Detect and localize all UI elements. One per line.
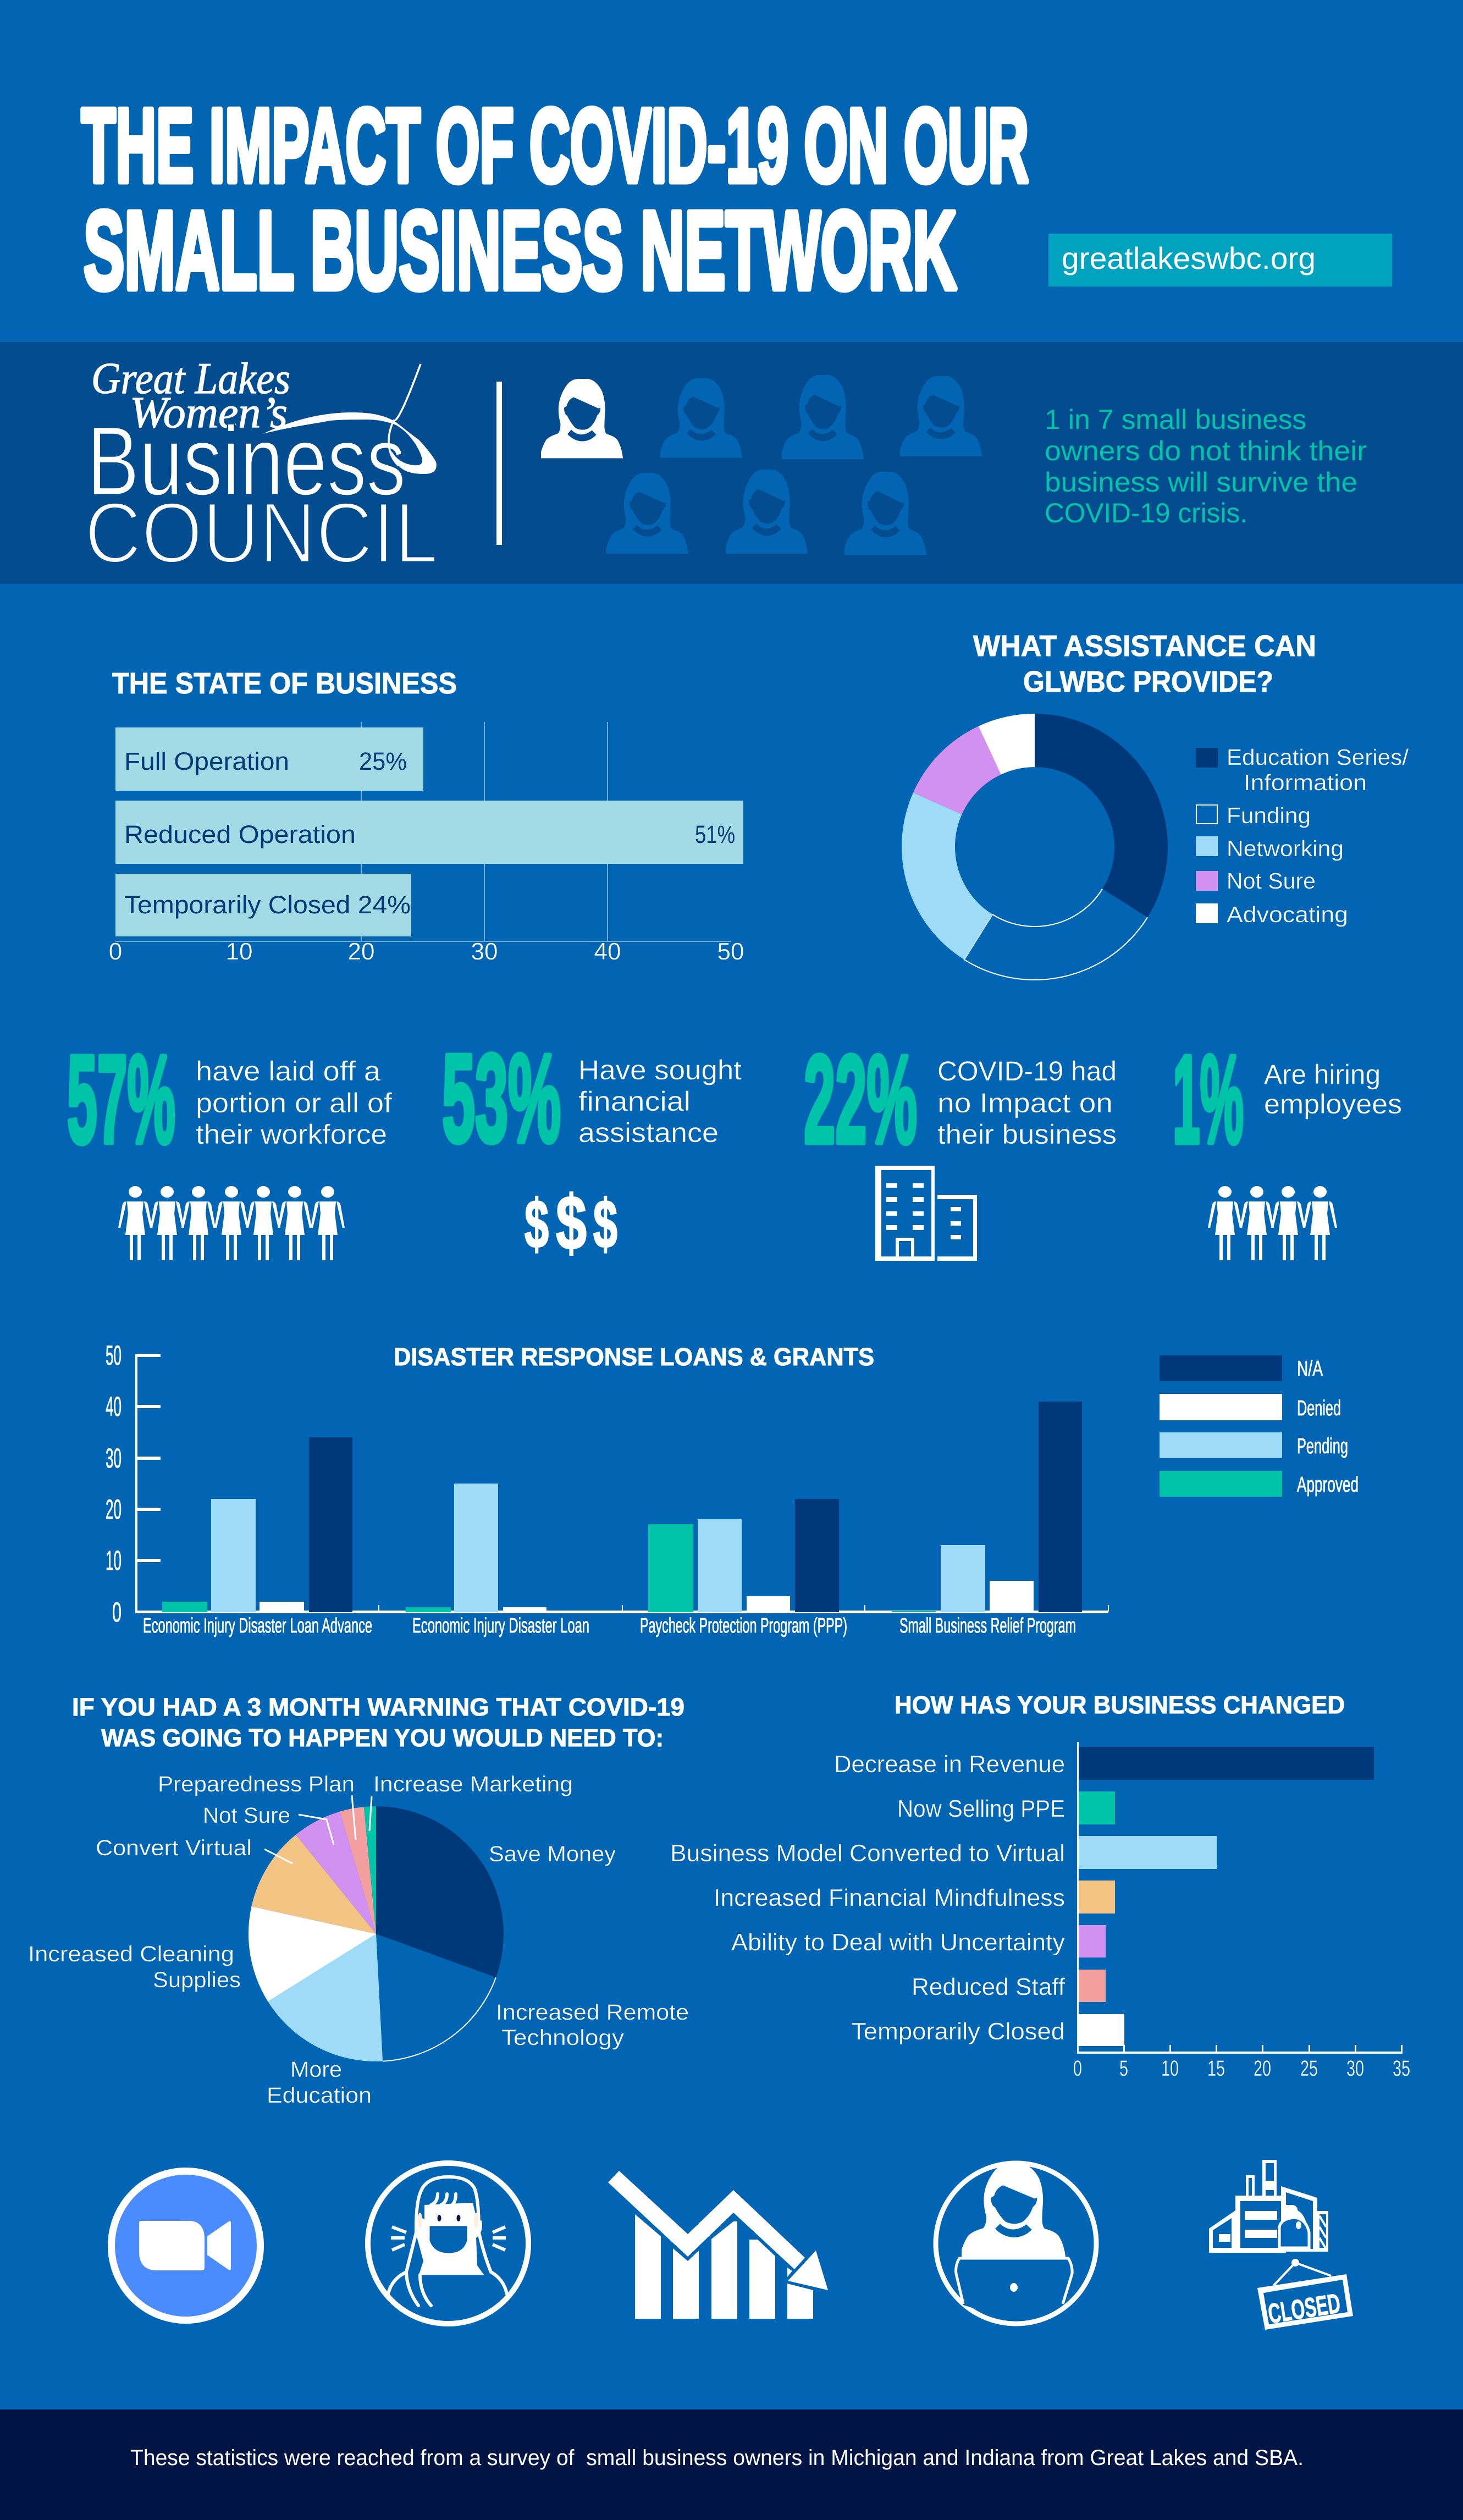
horizontal bar chart: Increased Financial Mindfulness [714, 1884, 1065, 1911]
bar chart: 25% [359, 747, 407, 775]
icon: video call [108, 2168, 264, 2324]
divider [496, 382, 502, 545]
panel: the state of business [109, 667, 744, 965]
stat: 57%: have laid off a [196, 1056, 380, 1087]
closed sign [1257, 2259, 1353, 2330]
legend: Advocating [1227, 902, 1348, 927]
column chart: 50 [106, 1340, 122, 1371]
band: 1 in 7 owners [0, 342, 1463, 584]
legend: Funding [1227, 803, 1311, 828]
legend: Networking [1227, 836, 1344, 861]
footer band [0, 2409, 1463, 2520]
logo: Great Lakes Women's Business Council: Business [87, 406, 406, 516]
text: 1 in 7 [1045, 404, 1367, 528]
pie labels: Increased Remote [496, 2000, 689, 2025]
pie chart [249, 1806, 504, 2061]
stat: 22%: their business [937, 1119, 1117, 1150]
stat: 22%: COVID-19 had [937, 1056, 1117, 1087]
pie labels: Not Sure [203, 1804, 290, 1828]
horizontal bar chart: Reduced Staff [912, 1973, 1065, 2000]
stat: 53%: 53% [442, 1029, 561, 1168]
horizontal bar chart: 20 [1254, 2056, 1271, 2081]
stat: 1%: 1% [1173, 1030, 1244, 1170]
panel: disaster response loans and grants [106, 1340, 1359, 1637]
stat: 1% [1173, 1030, 1402, 1260]
legend: Approved [1297, 1473, 1359, 1497]
closed sign: CLOSED [1266, 2287, 1343, 2329]
heading: GLWBC PROVIDE? [1023, 665, 1273, 698]
column chart: 40 [106, 1391, 122, 1422]
bars: group 2 [406, 1484, 546, 1612]
panel: what assistance can GLWBC provide [902, 630, 1409, 980]
logo: Great Lakes Women's Business Council: Great Lakes [91, 355, 290, 403]
heading [72, 1693, 684, 1752]
horizontal bar chart: Now Selling PPE [897, 1795, 1065, 1822]
heading [973, 630, 1316, 698]
text: 1 in 7: owners do not think their [1045, 435, 1367, 466]
factory [1209, 2160, 1328, 2253]
icon: dollar signs: $ [593, 1187, 617, 1262]
legend [1160, 1355, 1359, 1497]
pie labels: Education [267, 2083, 372, 2108]
horizontal bar chart: 5 [1119, 2056, 1128, 2081]
logo: Great Lakes Women's Business Council: COUNCIL [85, 485, 438, 581]
legend: Information [1244, 770, 1367, 795]
heading: THE STATE OF BUSINESS [112, 667, 457, 700]
stat: 22%: 22% [804, 1030, 917, 1170]
legend: Not Sure [1227, 868, 1316, 894]
icon: woman with laptop [936, 2163, 1096, 2324]
footnote text: These statistics were reached from a survey of small business owners in Michigan and Indiana from Great Lakes and SBA. [130, 2446, 1304, 2470]
donut chart [902, 714, 1168, 980]
stat: 57%: their workforce [196, 1119, 387, 1150]
bars: group 3 [648, 1499, 839, 1612]
bar chart: Full Operation [124, 747, 289, 775]
column chart: Paycheck Protection Program (PPP) [640, 1614, 847, 1637]
stat: 53% [442, 1029, 742, 1266]
horizontal bar chart: 25 [1300, 2056, 1318, 2081]
column chart: Economic Injury Disaster Loan [412, 1614, 589, 1637]
text: 1 in 7: 1 in 7 small business [1045, 404, 1306, 435]
horizontal bar chart [670, 1742, 1410, 2081]
icon: four women [1208, 1186, 1337, 1260]
panel: 3 month warning [28, 1693, 689, 2108]
bar chart: 30 [471, 938, 498, 965]
icon: dollar signs: $ [556, 1179, 587, 1266]
stat: 53%: financial [578, 1086, 691, 1117]
stat: 53%: Have sought [578, 1055, 742, 1085]
panel: how has your business changed [670, 1691, 1410, 2081]
column chart: Small Business Relief Program [899, 1614, 1076, 1637]
bars: group 1 [162, 1437, 352, 1612]
column chart: 20 [106, 1494, 122, 1525]
logo: Great Lakes Women's Business Council: Women’s [130, 389, 288, 437]
title [81, 87, 1029, 312]
heading: WHAT ASSISTANCE CAN [973, 630, 1316, 663]
pie labels: More [290, 2058, 342, 2082]
icon: dollar signs: $ [525, 1187, 549, 1262]
horizontal bar chart: 15 [1207, 2056, 1225, 2081]
horizontal bar chart: Business Model Converted to Virtual [670, 1840, 1065, 1867]
heading: DISASTER RESPONSE LOANS & GRANTS [394, 1343, 874, 1371]
legend: Education Series/ [1227, 745, 1409, 770]
horizontal bar chart: 0 [1073, 2056, 1082, 2081]
icon: office buildings [875, 1166, 977, 1261]
bar chart: 10 [226, 938, 252, 965]
heading: IF YOU HAD A 3 MONTH WARNING THAT COVID-19 [72, 1693, 684, 1721]
icon: seven women, one highlighted [541, 375, 982, 555]
logo: Great Lakes Women's Business Council [85, 355, 438, 581]
bar chart: Reduced Operation [124, 820, 356, 848]
column chart: 10 [106, 1545, 122, 1576]
stat: 57% [67, 1030, 392, 1260]
column chart [106, 1340, 1109, 1637]
stat: 22% [804, 1030, 1117, 1261]
stat: 1%: Are hiring [1264, 1059, 1381, 1090]
stat: 57%: 57% [67, 1030, 175, 1170]
icon: falling chart [608, 2171, 828, 2319]
pie labels: Preparedness Plan [158, 1772, 355, 1796]
leader lines [264, 1795, 372, 1863]
horizontal bar chart: 30 [1346, 2056, 1364, 2081]
bar chart: 51% [695, 820, 735, 848]
column chart: Economic Injury Disaster Loan Advance [143, 1614, 372, 1637]
horizontal bar chart: Ability to Deal with Uncertainty [731, 1929, 1065, 1956]
stat: 57%: portion or all of [196, 1088, 392, 1118]
heading: HOW HAS YOUR BUSINESS CHANGED [895, 1691, 1345, 1719]
stat: 53%: assistance [578, 1117, 719, 1148]
icon: closed factory [1209, 2160, 1353, 2330]
bar chart [109, 722, 744, 965]
column chart: 30 [106, 1443, 122, 1474]
website label: greatlakeswbc.org [1062, 241, 1316, 275]
text: 1 in 7: COVID-19 crisis. [1045, 498, 1247, 528]
bar chart: 40 [594, 938, 621, 965]
icon: seven women [118, 1186, 345, 1260]
pie labels: Increase Marketing [373, 1772, 573, 1796]
column chart: 0 [112, 1597, 122, 1628]
pie labels: Supplies [153, 1968, 241, 1992]
horizontal bar chart: 10 [1161, 2056, 1179, 2081]
bars: group 4 [892, 1402, 1082, 1612]
legend [1196, 745, 1409, 927]
pie labels: Save Money [489, 1842, 616, 1866]
bar chart: Temporarily Closed 24% [124, 891, 411, 919]
pie labels: Increased Cleaning [28, 1942, 234, 1966]
legend: Pending [1297, 1435, 1348, 1458]
stat: 1%: employees [1264, 1089, 1402, 1120]
horizontal bar chart: Decrease in Revenue [834, 1751, 1065, 1778]
bar chart: 0 [109, 938, 122, 965]
horizontal bar chart: Temporarily Closed [851, 2018, 1065, 2045]
horizontal bar chart: 35 [1393, 2056, 1410, 2081]
pie labels [28, 1772, 689, 2108]
icon: woman in mask [368, 2163, 528, 2324]
bar chart: 50 [717, 938, 744, 965]
text: 1 in 7: business will survive the [1045, 467, 1357, 498]
website label [1048, 234, 1392, 286]
pie labels: Technology [501, 2026, 624, 2050]
legend: Denied [1297, 1397, 1341, 1420]
pie labels: Convert Virtual [96, 1836, 252, 1860]
bar chart: 20 [348, 938, 374, 965]
stat: 22%: no Impact on [937, 1088, 1113, 1118]
heading: WAS GOING TO HAPPEN YOU WOULD NEED TO: [101, 1724, 664, 1752]
icon: dollar signs [525, 1179, 617, 1266]
legend: N/A [1297, 1357, 1323, 1381]
